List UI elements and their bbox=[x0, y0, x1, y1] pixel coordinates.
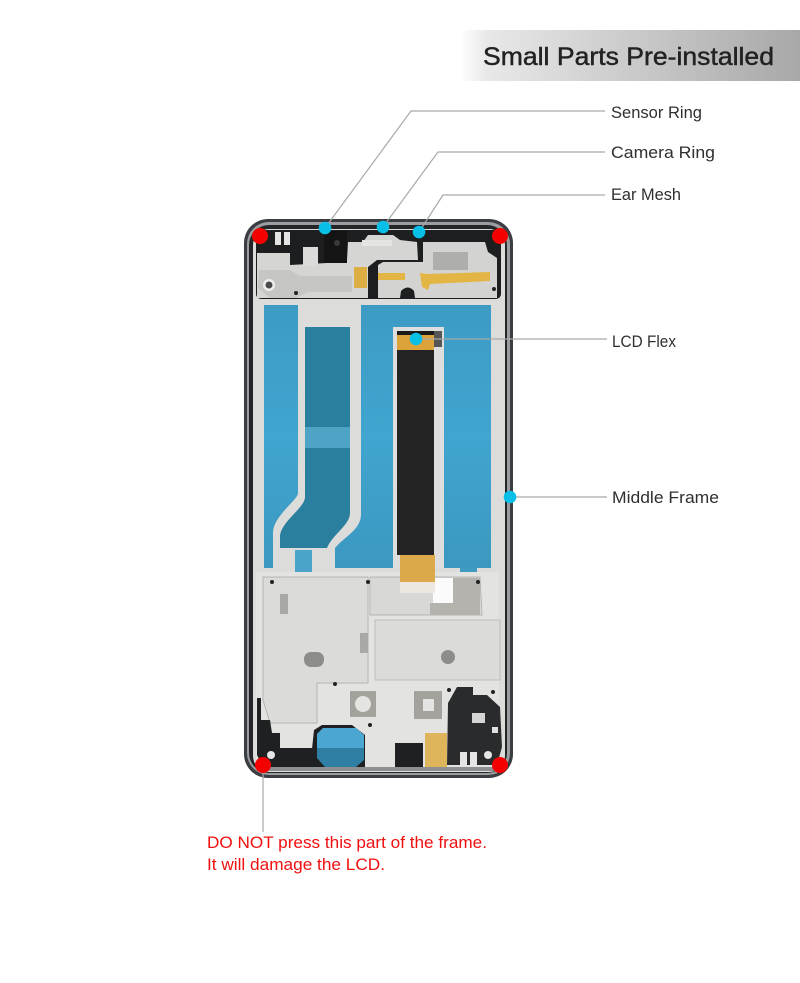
LCD flex cable bbox=[393, 327, 444, 593]
header banner: Small Parts Pre-installed bbox=[483, 43, 774, 71]
part labels: Middle Frame bbox=[612, 489, 719, 507]
top housing bbox=[256, 230, 501, 299]
part labels bbox=[611, 104, 719, 507]
phone screen assembly bbox=[244, 219, 513, 778]
header banner bbox=[460, 30, 800, 81]
part labels: Sensor Ring bbox=[611, 104, 702, 122]
lower shields bbox=[256, 572, 500, 768]
outer frame bbox=[244, 219, 513, 778]
part labels: LCD Flex bbox=[612, 333, 677, 351]
part labels: Camera Ring bbox=[611, 144, 715, 162]
leader lines bbox=[263, 111, 607, 832]
cyan marker dots bbox=[319, 221, 516, 503]
warning text bbox=[207, 834, 487, 874]
bottom housing bbox=[257, 687, 502, 771]
warning text: It will damage the LCD. bbox=[207, 856, 385, 874]
silver middle frame bbox=[256, 299, 499, 572]
warning text: DO NOT press this part of the frame. bbox=[207, 834, 487, 852]
part labels: Ear Mesh bbox=[611, 186, 681, 204]
red marker dots bbox=[252, 228, 508, 773]
blue film bbox=[264, 305, 491, 578]
